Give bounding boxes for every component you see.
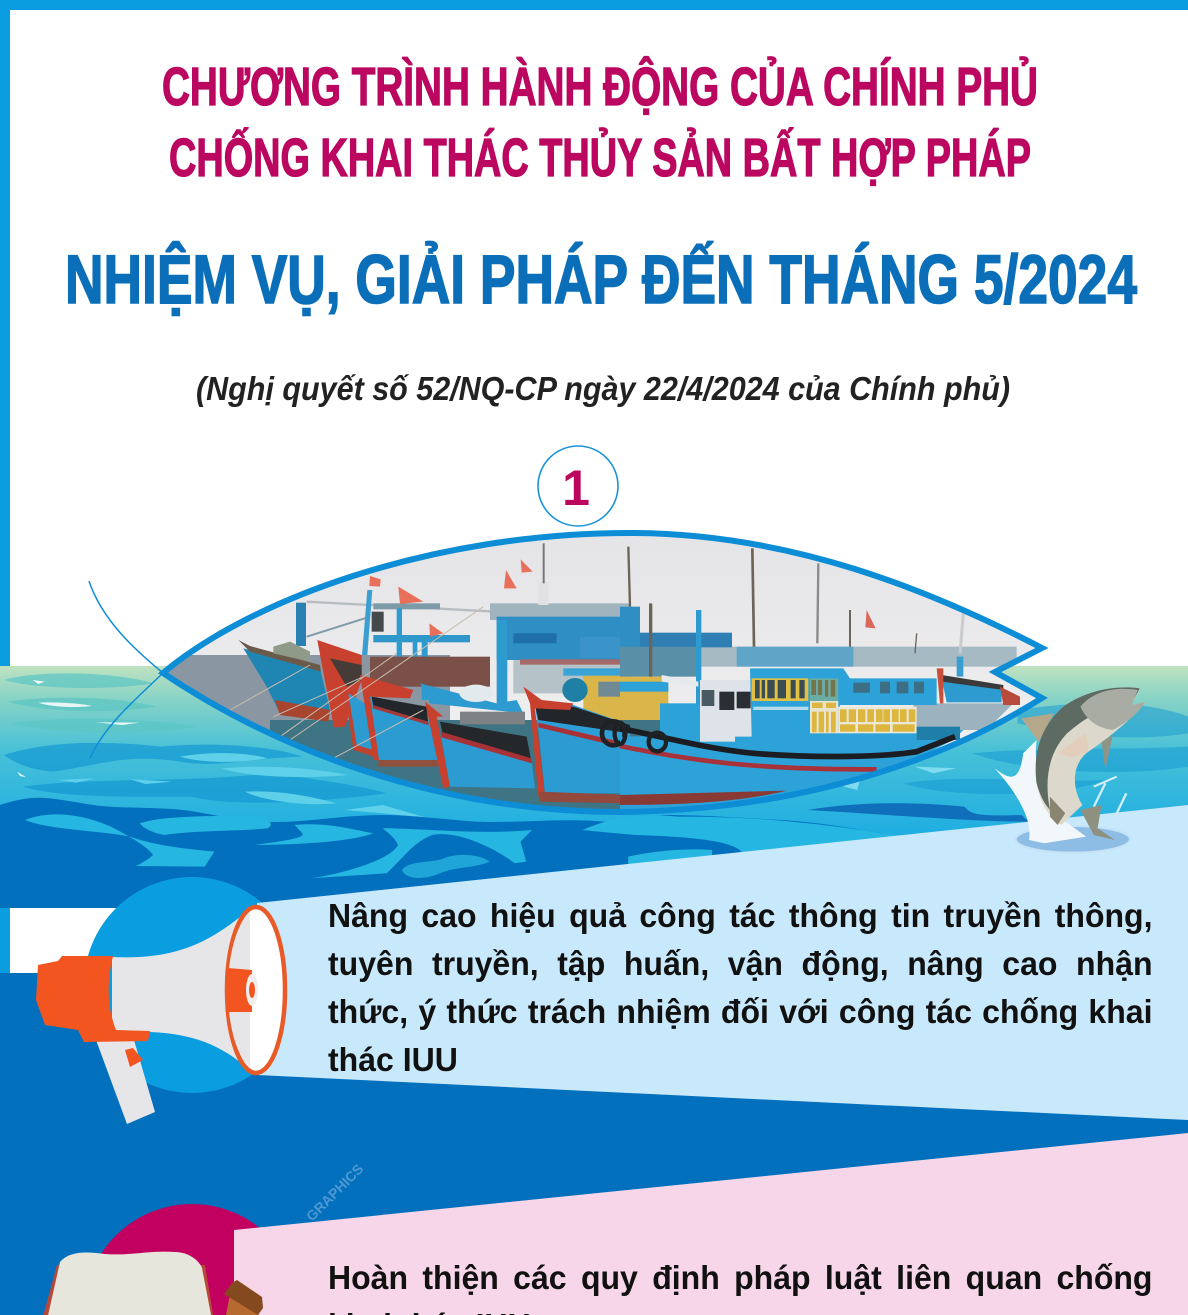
panel: pink legal band <box>234 1133 1188 1315</box>
subtitle: resolution reference: (Nghị quyết số 52/NQ-CP ngày 22/4/2024 của Chính phủ) <box>196 370 1010 407</box>
fish outline with tail <box>89 533 1042 812</box>
text block: awareness task: thác IUU <box>328 1041 458 1078</box>
circle behind book <box>84 1204 300 1315</box>
text block: awareness task: thức, ý thức trách nhiệm đối với công tác chống khai <box>328 993 1152 1030</box>
text block: awareness task: tuyên truyền, tập huấn, vận động, nâng cao nhận <box>328 945 1152 982</box>
text block: legal task: Hoàn thiện các quy định pháp luật liên quan chống <box>328 1259 1152 1296</box>
number badge 1: 1 <box>562 460 590 516</box>
photo: left boats <box>230 543 630 803</box>
text block: legal task <box>328 1259 1152 1315</box>
panel: light blue awareness band <box>257 805 1188 1120</box>
number badge 1 <box>538 446 618 526</box>
left border <box>0 0 10 670</box>
sea background <box>0 666 1188 836</box>
icon: book and gavel <box>42 1252 263 1315</box>
circle behind megaphone <box>84 877 300 1093</box>
text block: awareness task <box>328 897 1152 1078</box>
watermark: GRAPHICS <box>303 1161 366 1224</box>
jumping fish with splash <box>995 687 1145 853</box>
white left gap <box>0 908 120 973</box>
text block: awareness task: Nâng cao hiệu quả công tác thông tin truyền thông, <box>328 897 1152 934</box>
top border <box>0 0 1188 10</box>
icon: megaphone <box>36 907 285 1124</box>
title: action programme <box>162 56 1038 188</box>
dark blue sea and background <box>0 798 1188 1315</box>
photo: right boats <box>615 547 1020 805</box>
fish-shaped boat photo <box>168 536 1036 809</box>
